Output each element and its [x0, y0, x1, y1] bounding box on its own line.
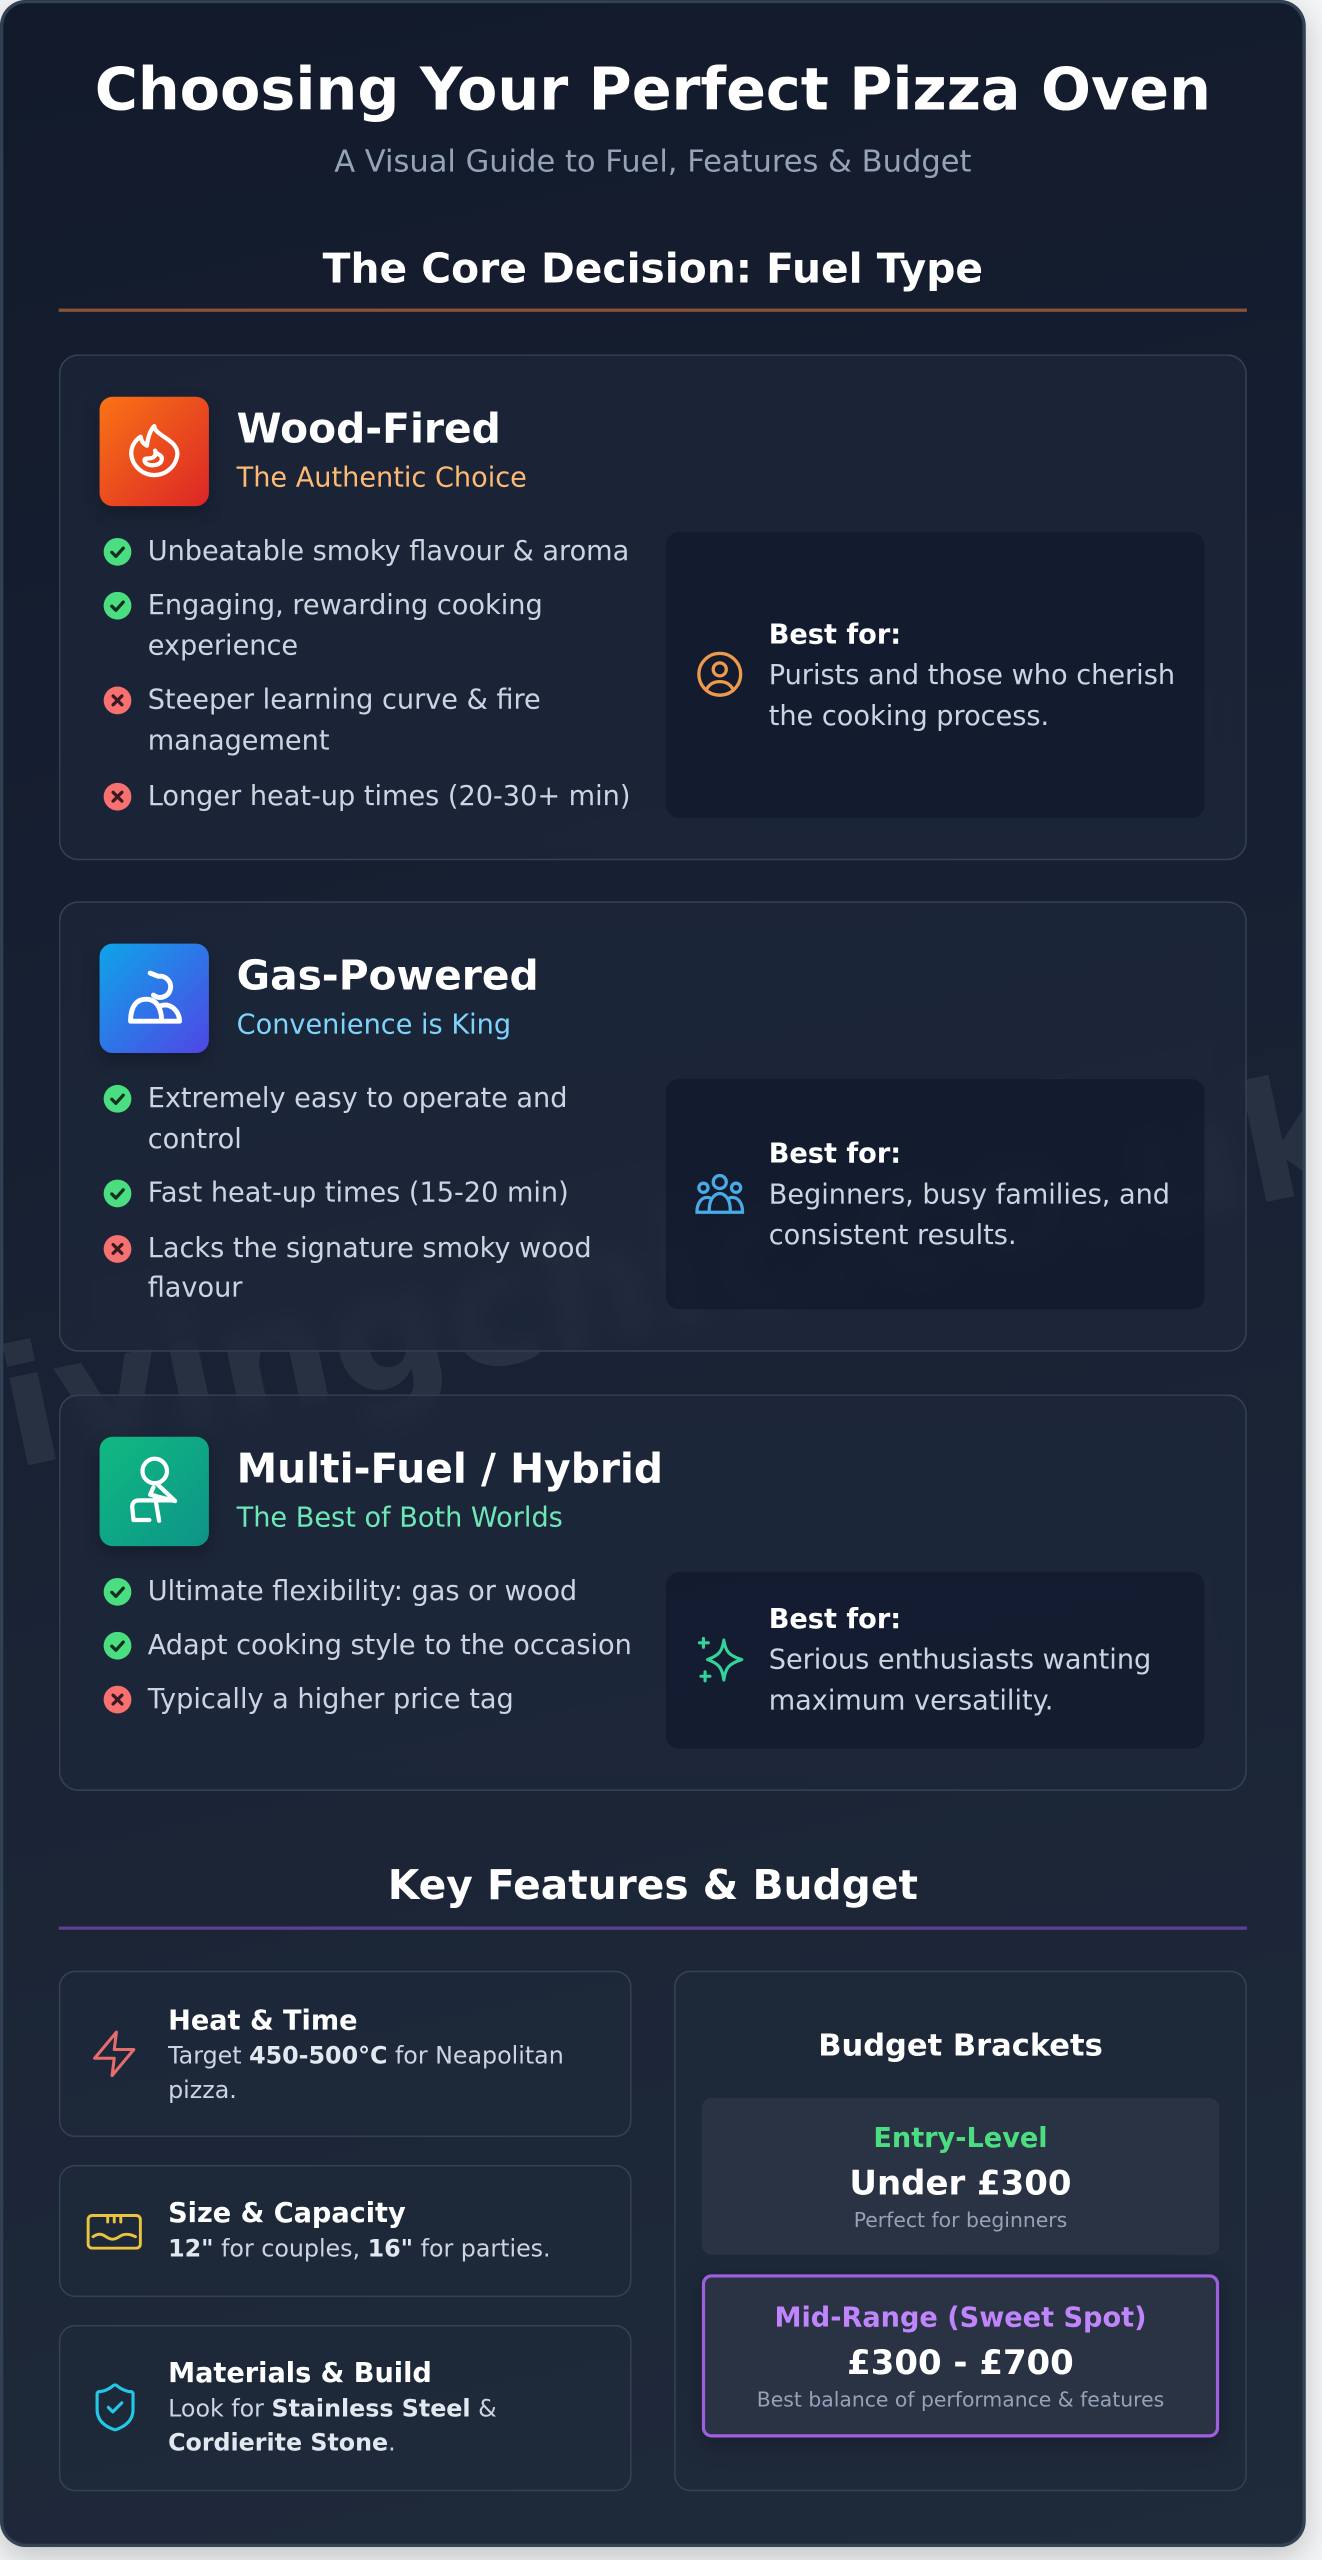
icon: sparkles — [698, 1636, 744, 1682]
size title: Size & Capacity — [168, 2198, 406, 2229]
best for text — [769, 1602, 1151, 1716]
mid-range price: £300 - £700 — [847, 2343, 1074, 2382]
best for text: the cooking process. — [769, 700, 1049, 731]
icon: person — [697, 652, 742, 697]
heat description: pizza. — [168, 2077, 237, 2104]
heading: key features: Key Features & Budget — [388, 1860, 918, 1908]
feature: materials and build — [59, 2325, 632, 2491]
multi-fuel subtitle: The Best of Both Worlds — [237, 1502, 563, 1533]
pro: easy to operate: Extremely easy to operate and — [148, 1082, 567, 1113]
pro: flexibility: Ultimate flexibility: gas or wood — [148, 1576, 577, 1607]
heat description — [168, 2042, 564, 2104]
best for text: maximum versatility. — [769, 1684, 1053, 1715]
materials description: Look for Stainless Steel & — [168, 2395, 497, 2423]
title: Choosing Your Perfect Pizza Oven — [95, 56, 1211, 123]
pro: easy to operate — [104, 1082, 567, 1154]
best for text: Best for: — [769, 1137, 901, 1168]
best for text: Purists and those who cherish — [769, 659, 1175, 690]
gas subtitle: Convenience is King — [237, 1009, 511, 1040]
heat title: Heat & Time — [168, 2004, 358, 2035]
con: no smoky flavour — [104, 1232, 592, 1303]
wood-fired subtitle: The Authentic Choice — [237, 462, 527, 493]
con: learning curve — [104, 684, 541, 756]
entry price: Under £300 — [849, 2163, 1072, 2202]
entry label: Entry-Level — [873, 2122, 1048, 2153]
gas heading: Gas-Powered — [237, 952, 539, 999]
panel: budget brackets — [674, 1971, 1247, 2491]
materials description: Cordierite Stone. — [168, 2429, 396, 2457]
panel: wood-fired — [59, 354, 1247, 860]
best for text: Serious enthusiasts wanting — [769, 1643, 1151, 1674]
entry note: Perfect for beginners — [854, 2207, 1067, 2232]
con: learning curve: Steeper learning curve & fire — [148, 684, 541, 715]
tier: mid-range — [702, 2274, 1219, 2438]
icon: hybrid figure — [100, 1437, 209, 1546]
panel: gas-powered — [59, 901, 1247, 1352]
materials title: Materials & Build — [168, 2357, 432, 2388]
icon: oven — [86, 2214, 142, 2250]
icon: flame — [100, 397, 209, 506]
con: no smoky flavour: Lacks the signature smoky wood — [148, 1232, 592, 1263]
best for text: Beginners, busy families, and — [769, 1178, 1170, 1209]
multi-fuel heading: Multi-Fuel / Hybrid — [237, 1445, 663, 1492]
panel: multi-fuel — [59, 1394, 1247, 1790]
feature: size and capacity — [59, 2165, 632, 2296]
pro: fast heat-up: Fast heat-up times (15-20 min) — [148, 1177, 569, 1208]
heading: the core decision: The Core Decision: Fuel Type — [323, 244, 983, 291]
icon: gas burner — [100, 944, 209, 1053]
best for text: Best for: — [769, 618, 901, 649]
icon: users — [695, 1174, 744, 1214]
con: learning curve: management — [148, 724, 329, 755]
best for text — [769, 618, 1175, 731]
callout: best for beginners — [666, 1079, 1204, 1309]
icon: bolt — [93, 2030, 136, 2078]
con: heat-up: Longer heat-up times (20-30+ min) — [148, 780, 630, 811]
pro: experience: Engaging, rewarding cooking — [148, 589, 543, 620]
size description: 12" for couples, 16" for parties. — [168, 2235, 551, 2263]
pro: adapt style: Adapt cooking style to the occasion — [148, 1629, 632, 1660]
mid-range note: Best balance of performance & features — [757, 2387, 1164, 2411]
con: no smoky flavour: flavour — [148, 1272, 242, 1303]
icon: shield — [96, 2383, 135, 2432]
heat description: Target 450-500°C for Neapolitan — [168, 2042, 564, 2070]
con: price: Typically a higher price tag — [148, 1683, 514, 1714]
mid-range label: Mid-Range (Sweet Spot) — [774, 2302, 1146, 2333]
pro: experience: experience — [148, 630, 298, 661]
best for text: Best for: — [769, 1602, 901, 1633]
pro: experience — [104, 589, 543, 661]
callout: best for enthusiasts — [666, 1572, 1204, 1749]
best for text — [769, 1137, 1170, 1250]
materials description — [168, 2395, 497, 2457]
feature: heat and time — [59, 1971, 632, 2136]
budget heading: Budget Brackets — [818, 2029, 1103, 2063]
pro: flavour: Unbeatable smoky flavour & aroma — [148, 536, 629, 567]
best for text: consistent results. — [769, 1219, 1017, 1250]
subtitle: A Visual Guide to Fuel, Features & Budget — [334, 145, 971, 180]
tier: entry-level — [702, 2098, 1219, 2255]
wood-fired heading: Wood-Fired — [237, 405, 501, 452]
pro: easy to operate: control — [148, 1123, 242, 1154]
callout: best for purists — [666, 532, 1204, 818]
